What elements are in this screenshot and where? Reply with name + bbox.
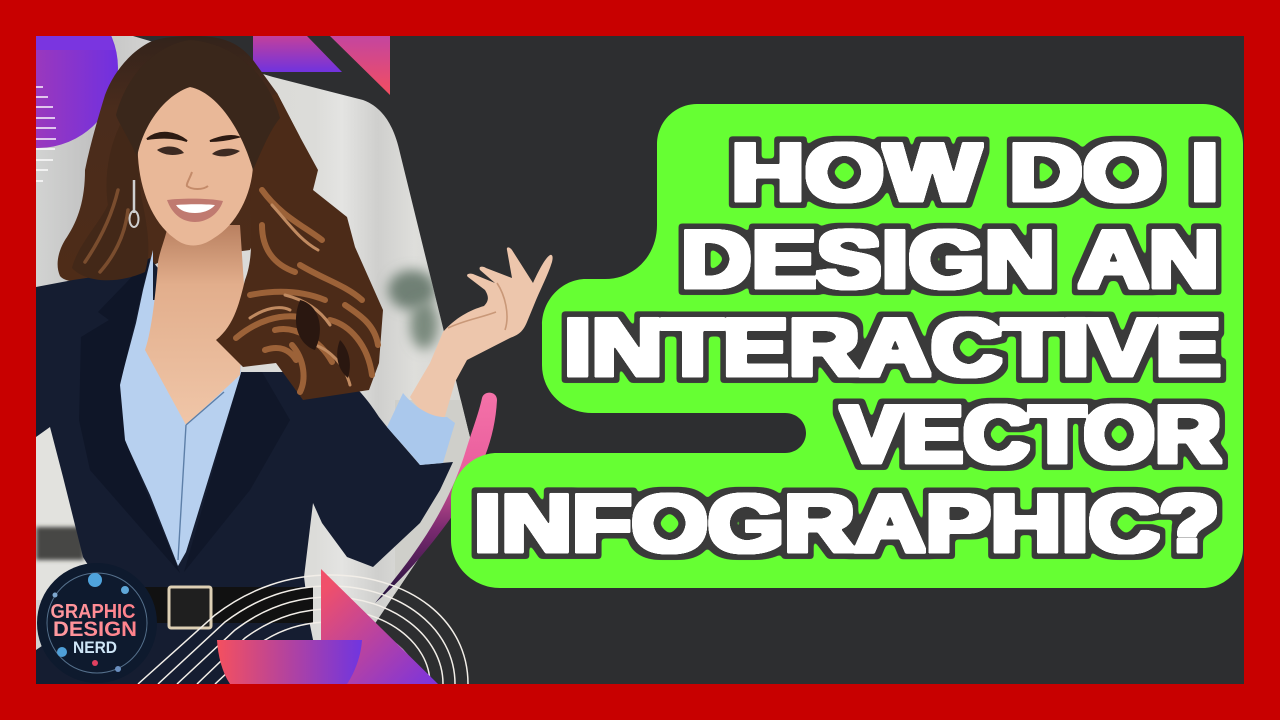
shirt [120,250,241,566]
nose [187,172,208,189]
title: INTERACTIVE [564,303,1221,393]
logo badge: Graphic Design Nerd: GRAPHIC [50,601,136,623]
logo badge: Graphic Design Nerd: NERD [73,638,117,657]
green title panel [451,104,1243,588]
shape: bottom gradient triangle [321,569,438,684]
hair right waves [216,93,383,400]
smile [167,199,223,222]
hair left curls [72,125,148,280]
jacket body [36,258,453,684]
pink swoosh [375,393,497,603]
neck and chest [145,225,245,425]
decorative white lines [36,87,56,181]
illustration: woman presenter [36,36,553,684]
belt buckle [169,587,211,628]
logo badge: Graphic Design Nerd [37,563,157,683]
title: DESIGN AN [681,215,1219,305]
photo background: office wall [36,36,486,684]
arm and hand [410,247,553,423]
jacket lapels [79,258,290,573]
logo badge: Graphic Design Nerd: DESIGN [53,617,137,641]
shirt placket [178,392,224,560]
hair top parting [116,84,280,170]
eyes [157,147,240,156]
earring [133,180,135,213]
title: HOW DO I [731,128,1219,218]
title: INFOGRAPHIC? [474,479,1219,569]
belt [145,587,313,623]
shirt cuff [387,393,455,465]
shape: top gradient triangle [330,36,390,95]
concentric white arcs [138,575,468,684]
eyebrows [147,133,238,141]
shape: bottom gradient semicircle [217,640,362,684]
hair back [58,36,300,282]
title [474,128,1221,569]
shape: top gradient trapezoid [253,36,342,72]
title: VECTOR [841,390,1221,480]
face [138,87,253,246]
shape: top-left gradient circle [36,36,118,148]
